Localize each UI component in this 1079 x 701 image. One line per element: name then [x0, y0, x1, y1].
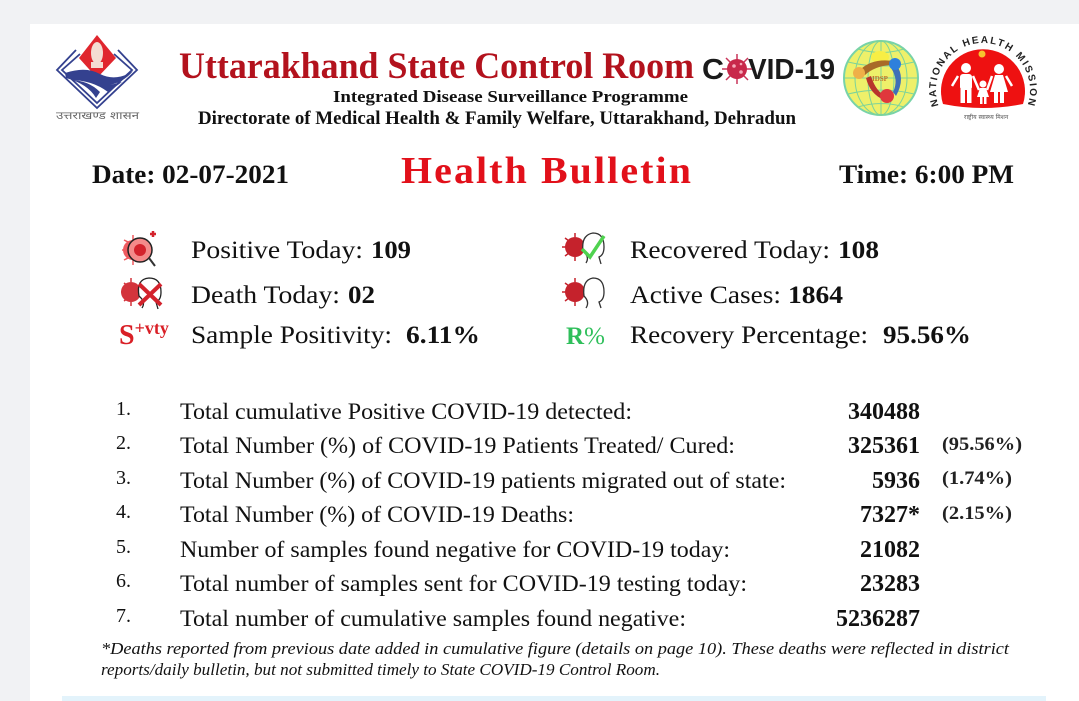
row 3: 3.	[116, 467, 131, 489]
row 4: (2.15%)	[942, 504, 1012, 524]
recovery percentage	[630, 322, 971, 349]
row 2: Total Number (%) of COVID-19 Patients Treated/ Cured:	[180, 433, 735, 459]
row 4: Total Number (%) of COVID-19 Deaths:	[180, 502, 574, 528]
row 6: Total number of samples sent for COVID-19 testing today:	[180, 571, 747, 597]
footnote	[101, 639, 1010, 679]
icon: S+vty: S	[119, 320, 135, 351]
row 5: 5.	[116, 536, 131, 558]
row 3: 5936	[872, 468, 920, 494]
recovered today: 108	[838, 237, 879, 264]
header	[56, 35, 1037, 129]
subtitle: programme: Integrated Disease Surveillance Programme	[333, 87, 688, 106]
recovered today: Recovered Today:	[630, 237, 830, 264]
positive today: 109	[371, 237, 411, 264]
row 7	[116, 605, 920, 632]
row 3	[116, 467, 1012, 494]
row 1: Total cumulative Positive COVID-19 detected:	[180, 399, 632, 425]
recovery percentage: 95.56%	[883, 322, 971, 349]
row 7: 5236287	[836, 606, 920, 632]
covid-19 logo	[702, 54, 835, 86]
recovery percentage: Recovery Percentage:	[630, 322, 868, 349]
icon: recovered today	[562, 233, 604, 264]
icon: National Health Mission logo: NATIONAL HEALTH MISSION	[929, 36, 1037, 107]
footnote: reports/daily bulletin, but not submitted timely to State COVID-19 Control Room.	[101, 660, 660, 679]
icon: Uttarakhand emblem: उत्तराखण्ड शासन	[56, 110, 139, 122]
row 2: 2.	[116, 432, 131, 454]
row 5	[116, 536, 920, 563]
heading: Health Bulletin: Health Bulletin	[401, 150, 693, 192]
row 2: 325361	[848, 433, 920, 459]
active cases: 1864	[788, 282, 844, 309]
row 5: Number of samples found negative for COVID-19 today:	[180, 537, 730, 563]
panel: cumulative statistics list	[116, 398, 1022, 632]
row 6	[116, 570, 920, 597]
row 5: 21082	[860, 537, 920, 563]
footnote: *Deaths reported from previous date added in cumulative figure (details on page 10). These deaths were reflected in district	[101, 639, 1010, 658]
row 3: Total Number (%) of COVID-19 patients migrated out of state:	[180, 468, 786, 494]
row 2: (95.56%)	[942, 435, 1022, 455]
row 3: (1.74%)	[942, 469, 1012, 489]
icon: IDSP globe logo: IDSP	[872, 75, 889, 83]
date: Date: 02-07-2021	[92, 160, 289, 189]
subtitle: directorate: Directorate of Medical Health & Family Welfare, Uttarakhand, Dehradun	[198, 109, 797, 129]
row 6: 23283	[860, 571, 920, 597]
sample positivity: Sample Positivity:	[191, 322, 392, 349]
row 1	[116, 398, 920, 425]
sample positivity	[191, 322, 480, 349]
icon: S+vty: +vty	[135, 318, 169, 338]
row 4	[116, 501, 1012, 528]
row 6: 6.	[116, 570, 131, 592]
active cases: Active Cases:	[630, 282, 781, 309]
title: Uttarakhand State Control Room	[179, 46, 694, 87]
death today: Death Today:	[191, 282, 340, 309]
icon: National Health Mission logo: राष्ट्रीय स्वास्थ्य मिशन	[964, 113, 1009, 121]
covid-19 logo: VID-19	[748, 54, 835, 86]
row 1: 1.	[116, 398, 131, 420]
icon: Uttarakhand emblem	[56, 35, 139, 122]
icon: active cases	[562, 278, 604, 308]
row 4: 4.	[116, 501, 131, 523]
icon: positive today	[122, 231, 156, 266]
icon: IDSP globe logo	[844, 41, 918, 115]
row 4: 7327*	[860, 502, 920, 528]
row 7: 7.	[116, 605, 131, 627]
row 2	[116, 432, 1022, 459]
active cases	[630, 282, 844, 309]
sample positivity: 6.11%	[406, 322, 480, 349]
icon: R%: R%	[566, 323, 605, 350]
time: Time: 6:00 PM	[839, 160, 1014, 189]
row 1: 340488	[848, 399, 920, 425]
icon: death today	[121, 278, 161, 309]
positive today: Positive Today:	[191, 237, 363, 264]
row 7: Total number of cumulative samples found negative:	[180, 606, 686, 632]
panel: daily summary	[119, 231, 971, 351]
death today: 02	[348, 282, 375, 309]
covid-19 logo: C	[702, 54, 724, 86]
